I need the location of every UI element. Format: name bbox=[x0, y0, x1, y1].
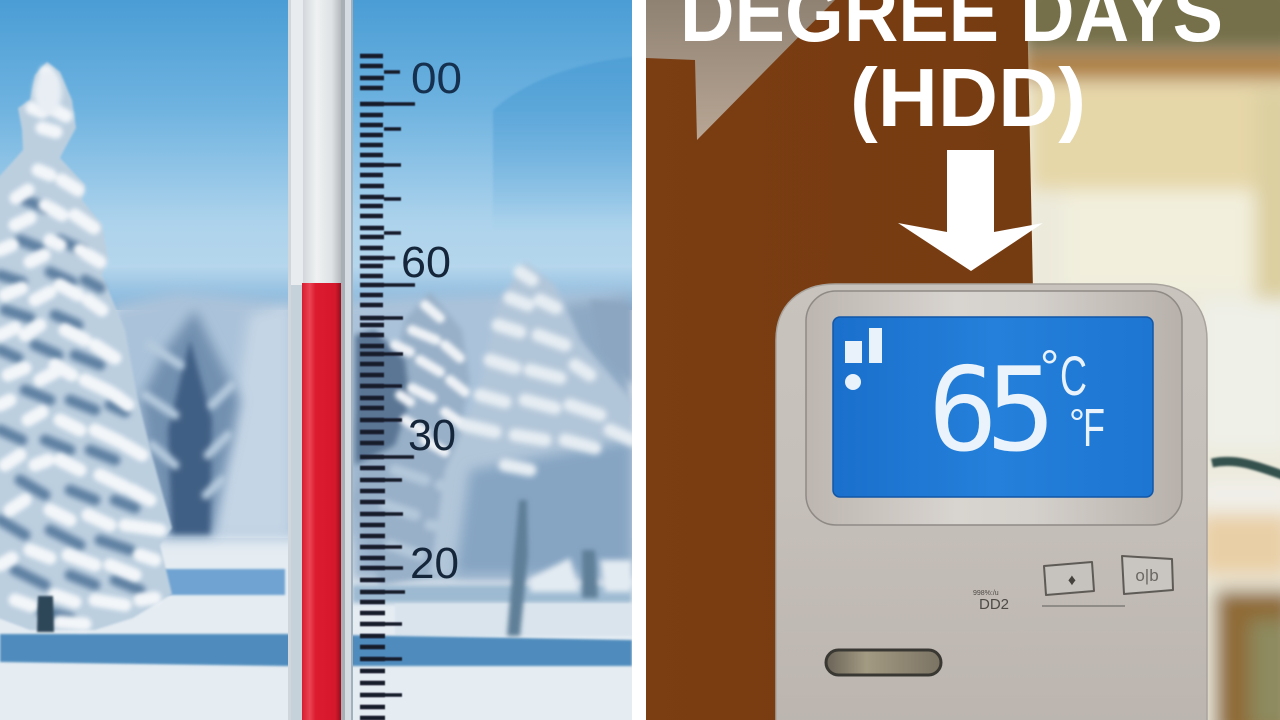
thermometer scale ticks bbox=[360, 56, 415, 718]
tiny printed label bbox=[973, 590, 1009, 613]
scale label 60: 60 bbox=[401, 238, 451, 287]
white divider between panels bbox=[632, 0, 646, 720]
tree trunk bbox=[37, 596, 54, 632]
tip highlights bbox=[34, 70, 62, 114]
tube side strip bbox=[341, 0, 345, 720]
snow patches by right trees bbox=[530, 558, 632, 592]
title: heating degree days bbox=[680, 0, 1223, 144]
dark fir tree in the background bbox=[140, 310, 240, 534]
degrees celsius unit: C bbox=[1060, 344, 1087, 407]
frosted tree on the right bbox=[430, 262, 632, 575]
sky background bbox=[0, 0, 632, 310]
degrees celsius unit bbox=[1040, 342, 1087, 407]
dark curtain rod bbox=[1212, 461, 1280, 476]
thermostat body bbox=[776, 284, 1207, 720]
scale label 00: 00 bbox=[411, 54, 462, 103]
brown wall bbox=[646, 0, 1033, 720]
frosted tree in the middle bbox=[352, 292, 470, 585]
beige wall notch bbox=[646, 0, 835, 140]
branch shadows bbox=[0, 200, 140, 618]
snow bands bbox=[0, 538, 632, 720]
signal icon bbox=[845, 328, 882, 390]
thermometer bbox=[288, 0, 353, 720]
large snow-covered fir tree bbox=[0, 62, 172, 632]
snowy ground bbox=[0, 538, 632, 720]
degrees fahrenheit unit: ° bbox=[1069, 402, 1085, 446]
tree silhouette bbox=[0, 62, 172, 630]
distant misty forest bbox=[110, 290, 632, 580]
glass tube bbox=[288, 0, 291, 720]
minor ticks bbox=[360, 56, 385, 718]
scale label 30: 30 bbox=[408, 411, 456, 460]
tiny printed label: DD2 bbox=[979, 596, 1009, 613]
degrees celsius unit: ° bbox=[1040, 342, 1059, 395]
blurred room background bbox=[1020, 0, 1280, 720]
printed line bbox=[1042, 605, 1125, 607]
scale label 20: 20 bbox=[410, 539, 459, 588]
curved sky shape bbox=[492, 57, 632, 212]
mode button bbox=[1122, 556, 1173, 594]
tiny printed label: 998%:/u bbox=[973, 590, 999, 597]
down button bbox=[1044, 562, 1094, 595]
degrees fahrenheit unit bbox=[1069, 398, 1105, 458]
tree trunks bbox=[507, 500, 598, 636]
major ticks bbox=[384, 72, 415, 695]
shadow band upper bbox=[140, 569, 285, 595]
left tube edge bbox=[291, 0, 303, 285]
slot bbox=[826, 650, 941, 675]
title line: HDD: (HDD) bbox=[850, 51, 1086, 144]
panel: winter outdoor scene with thermometer bbox=[0, 0, 640, 720]
panel: indoor scene with thermostat bbox=[646, 0, 1280, 720]
temperature reading 65: 65 bbox=[928, 343, 1056, 478]
mode button: o|b bbox=[1135, 566, 1159, 585]
red mercury column bbox=[302, 283, 341, 720]
display bezel bbox=[806, 291, 1182, 525]
shadow band lower bbox=[0, 634, 632, 666]
degrees fahrenheit unit: F bbox=[1083, 398, 1105, 458]
thermostat device bbox=[776, 284, 1207, 720]
inner glass bbox=[303, 0, 341, 283]
LCD screen bbox=[833, 317, 1153, 497]
arrow pointing to thermostat bbox=[898, 150, 1043, 271]
snow highlights bbox=[0, 72, 160, 624]
down button: ♦ bbox=[1068, 572, 1076, 589]
